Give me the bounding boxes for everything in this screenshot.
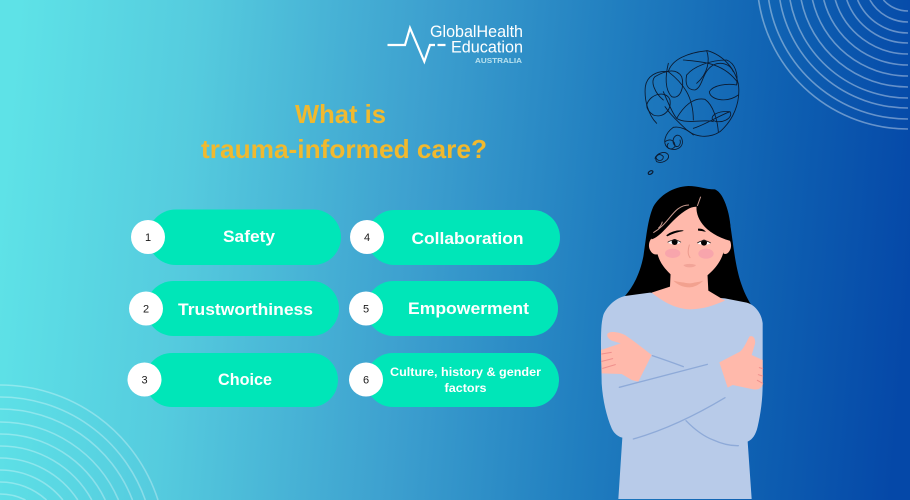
logo wordmark bbox=[430, 23, 523, 65]
finger lines bbox=[602, 352, 763, 383]
head and neck bbox=[649, 187, 731, 309]
nose bbox=[688, 245, 690, 258]
pill 5: Empowerment: 5 bbox=[363, 304, 369, 316]
pill 1: Safety bbox=[131, 210, 341, 265]
right-side hand bbox=[719, 336, 763, 389]
decorative rings: bottom left bbox=[0, 385, 158, 500]
logo: Global Health Education Australia bbox=[388, 23, 523, 65]
logo wordmark: AUSTRALIA bbox=[475, 56, 523, 65]
pill 5: Empowerment bbox=[349, 281, 558, 336]
pill 3: Choice bbox=[128, 353, 338, 407]
title: What is bbox=[295, 99, 386, 129]
pill 1: Safety: 1 bbox=[145, 232, 151, 244]
left-side hand bbox=[601, 332, 652, 382]
pill 4: Collaboration: 4 bbox=[364, 232, 370, 244]
bangs bbox=[649, 187, 731, 241]
face bbox=[656, 207, 725, 283]
pill 5: Empowerment: Empowerment bbox=[408, 300, 530, 318]
pill 1: Safety: Safety bbox=[223, 228, 276, 246]
pill 3: Choice: Choice bbox=[218, 371, 272, 389]
title bbox=[201, 99, 487, 164]
left eye bbox=[668, 239, 681, 245]
pill 2: Trustworthiness bbox=[129, 281, 339, 336]
title: trauma-informed care? bbox=[201, 134, 487, 164]
person: worried woman with crossed arms bbox=[601, 186, 763, 499]
hair back bbox=[625, 186, 754, 309]
logo wordmark: Education bbox=[451, 38, 523, 56]
pill 6: Culture, history & gender factors bbox=[349, 353, 559, 407]
pill 6: Culture, history & gender factors: Culture, history & gender bbox=[390, 365, 541, 379]
eyebrows bbox=[667, 229, 705, 236]
neck shadow bbox=[673, 281, 703, 287]
pill 4: Collaboration bbox=[350, 210, 560, 265]
neck bbox=[652, 272, 725, 309]
logo pulse icon bbox=[388, 28, 446, 62]
logo wordmark: GlobalHealth bbox=[430, 23, 523, 41]
pill 2: Trustworthiness: 2 bbox=[143, 304, 149, 316]
ears bbox=[649, 237, 731, 254]
pill 6: Culture, history & gender factors: factors bbox=[444, 381, 487, 395]
sweater bbox=[601, 293, 763, 499]
right eye bbox=[697, 240, 711, 246]
thought bubble scribble bbox=[645, 51, 739, 174]
pill 3: Choice: 3 bbox=[141, 374, 148, 386]
sweater fold lines bbox=[619, 356, 738, 446]
pill 4: Collaboration: Collaboration bbox=[412, 230, 524, 248]
cheeks bbox=[665, 249, 714, 259]
pill 6: Culture, history & gender factors: 6 bbox=[363, 374, 369, 386]
pill 2: Trustworthiness: Trustworthiness bbox=[178, 301, 313, 319]
mouth bbox=[683, 264, 696, 267]
hair highlights bbox=[653, 197, 701, 233]
decorative rings: top right bbox=[759, 0, 908, 129]
crossed hands bbox=[601, 332, 763, 389]
